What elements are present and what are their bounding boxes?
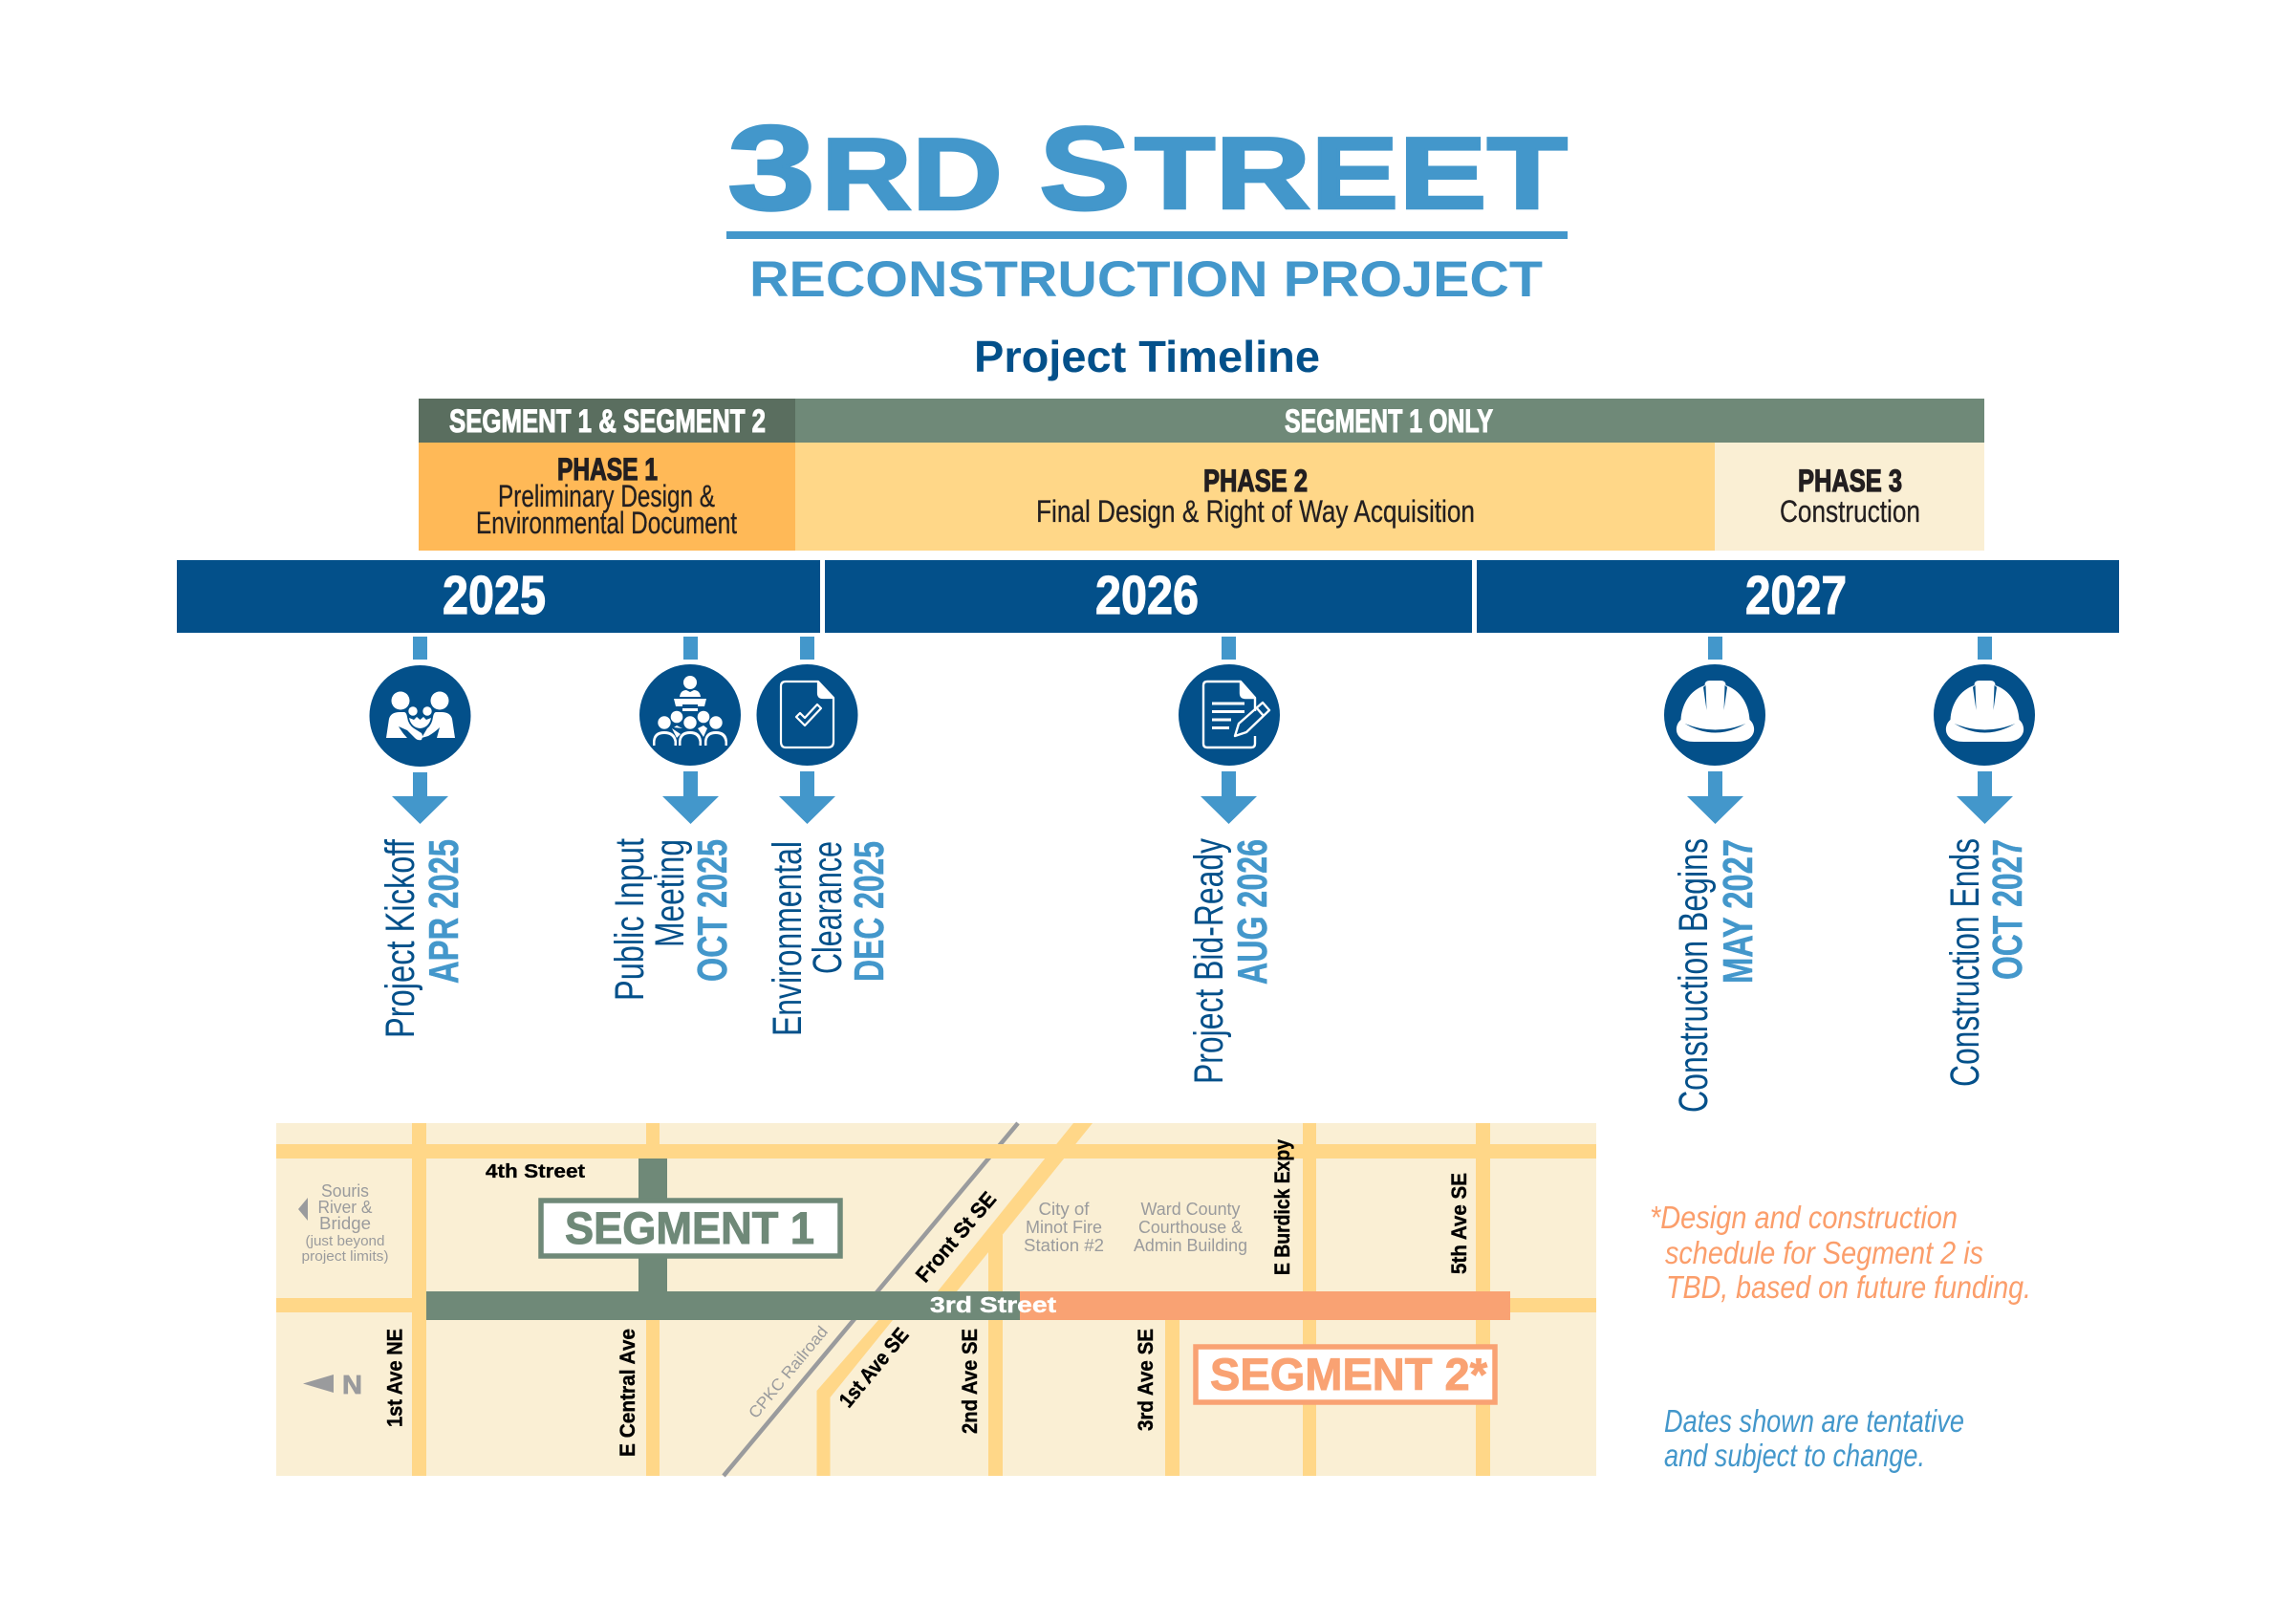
date: oct 2027: OCT 2027	[1984, 839, 2031, 980]
note: tentative dates: Dates shown are tentative	[1664, 1403, 1964, 1439]
year 2026	[825, 560, 1472, 633]
road label: 2nd Ave SE: 2nd Ave SE	[958, 1329, 982, 1434]
icon: checked document	[781, 682, 833, 747]
date: apr 2025: APR 2025	[421, 839, 467, 984]
road label: 3rd Street: 3rd Street	[930, 1292, 1056, 1317]
segment 2 callout: SEGMENT 2*	[1210, 1349, 1488, 1399]
year 2025: 2025	[443, 565, 546, 626]
note: segment 2 schedule: *Design and construction	[1650, 1200, 1958, 1235]
phase bands	[419, 443, 1984, 551]
landmark: fire station	[1024, 1200, 1104, 1255]
date: oct 2025: OCT 2025	[689, 839, 736, 982]
label: public input meeting: Public Input	[607, 838, 653, 1001]
phase 1: Environmental Document	[476, 506, 737, 540]
road label: Front St SE: Front St SE	[911, 1187, 1001, 1287]
icon: document and pencil	[1203, 682, 1269, 747]
phase 1	[419, 443, 795, 551]
north arrow	[303, 1370, 362, 1399]
milestone: project kickoff	[369, 637, 470, 1038]
landmark: courthouse: Courthouse &	[1138, 1218, 1243, 1237]
title rule	[726, 231, 1568, 239]
segment 1 and 2 cell	[419, 399, 795, 443]
railroad line	[724, 1123, 1018, 1476]
landmark: courthouse: Admin Building	[1134, 1236, 1247, 1255]
milestone: public input meeting	[607, 637, 741, 1001]
north arrow: N	[342, 1370, 362, 1399]
milestone: environmental clearance	[757, 637, 893, 1036]
year 2025	[177, 560, 820, 633]
map panel	[276, 1123, 1596, 1476]
label: environmental clearance	[765, 841, 851, 1036]
label: project kickoff: Project Kickoff	[378, 838, 423, 1038]
landmark: fire station: Station #2	[1024, 1236, 1104, 1255]
landmark: fire station: Minot Fire	[1026, 1218, 1102, 1237]
road label: 3rd Ave SE: 3rd Ave SE	[1134, 1329, 1158, 1431]
label: environmental clearance: Clearance	[805, 841, 851, 974]
title: 3rd Street: S	[1039, 103, 1131, 235]
landmark: fire station: City of	[1038, 1200, 1091, 1219]
segment 1 road	[426, 1291, 1020, 1320]
date: aug 2026: AUG 2026	[1229, 839, 1276, 985]
road label: E Central Ave: E Central Ave	[616, 1329, 639, 1457]
phase 3	[1715, 443, 1984, 551]
segment 1 and 2 cell: SEGMENT 1 & SEGMENT 2	[449, 403, 766, 440]
landmark: Souris River and Bridge: project limits)	[302, 1248, 388, 1265]
road label: 5th Ave SE: 5th Ave SE	[1447, 1173, 1471, 1274]
rail label: CPKC Railroad: CPKC Railroad	[745, 1323, 832, 1422]
landmark: Souris River and Bridge: River &	[317, 1198, 373, 1217]
landmark: courthouse: Ward County	[1141, 1200, 1241, 1219]
icon: hard hat	[1946, 681, 2023, 742]
segment 1 callout: SEGMENT 1	[565, 1202, 814, 1253]
phase 1: Preliminary Design &	[498, 479, 715, 513]
road label: 1st Ave SE: 1st Ave SE	[834, 1323, 914, 1412]
landmark: Souris River and Bridge	[298, 1181, 388, 1265]
road label: 1st Ave NE: 1st Ave NE	[382, 1329, 407, 1427]
road network	[276, 1123, 1596, 1476]
phase 2: PHASE 2	[1203, 464, 1308, 498]
segment 1 only cell	[795, 399, 1984, 443]
segment 1 only cell: SEGMENT 1 ONLY	[1285, 403, 1493, 440]
title: 3rd Street: 3	[727, 100, 815, 235]
icon: hard hat	[1677, 681, 1754, 742]
phase 2: Final Design & Right of Way Acquisition	[1036, 494, 1475, 529]
landmark: courthouse	[1134, 1200, 1247, 1255]
milestone: construction begins	[1664, 637, 1765, 1113]
year bar	[177, 560, 2119, 633]
road label: E Burdick Expy: E Burdick Expy	[1270, 1138, 1294, 1275]
label: environmental clearance: Environmental	[765, 841, 811, 1036]
icon: family group	[386, 692, 455, 740]
segment 2 road	[1020, 1291, 1510, 1320]
landmark: Souris River and Bridge: Bridge	[319, 1214, 371, 1233]
note: segment 2 schedule: schedule for Segment 2 is	[1665, 1235, 1983, 1270]
icon: presenter and audience	[653, 676, 727, 746]
label: construction begins: Construction Begins	[1671, 838, 1717, 1113]
label: construction ends: Construction Ends	[1942, 838, 1988, 1087]
note: tentative dates: and subject to change.	[1664, 1438, 1925, 1473]
date: may 2027: MAY 2027	[1715, 839, 1762, 984]
date: dec 2025: DEC 2025	[846, 841, 893, 982]
year 2027: 2027	[1745, 565, 1847, 626]
landmark: Souris River and Bridge: Souris	[321, 1181, 369, 1201]
title: 3rd Street: TREET	[1135, 116, 1568, 230]
heading: Project Timeline: Project Timeline	[974, 332, 1320, 381]
phase 3: PHASE 3	[1798, 464, 1902, 498]
note: tentative dates	[1664, 1403, 1964, 1473]
phase 3: Construction	[1780, 494, 1920, 529]
phase 2	[795, 443, 1715, 551]
label: public input meeting: Meeting	[647, 839, 693, 947]
title: 3rd Street: RD	[821, 117, 1003, 231]
segment header bar	[419, 399, 1984, 443]
milestone: construction ends	[1934, 637, 2035, 1087]
subtitle: Reconstruction Project: RECONSTRUCTION PROJECT	[749, 251, 1543, 308]
label: public input meeting	[607, 838, 693, 1001]
note: segment 2 schedule: TBD, based on future funding.	[1666, 1269, 2031, 1305]
milestone: project bid-ready	[1179, 637, 1280, 1084]
phase 1: PHASE 1	[557, 452, 658, 487]
note: segment 2 schedule	[1650, 1200, 2031, 1305]
year 2026: 2026	[1095, 565, 1199, 626]
label: project bid-ready: Project Bid-Ready	[1186, 838, 1232, 1084]
year 2027	[1477, 560, 2119, 633]
landmark: Souris River and Bridge: (just beyond	[306, 1233, 384, 1249]
road label: 4th Street: 4th Street	[486, 1161, 585, 1182]
segment 1 connector	[638, 1158, 667, 1291]
